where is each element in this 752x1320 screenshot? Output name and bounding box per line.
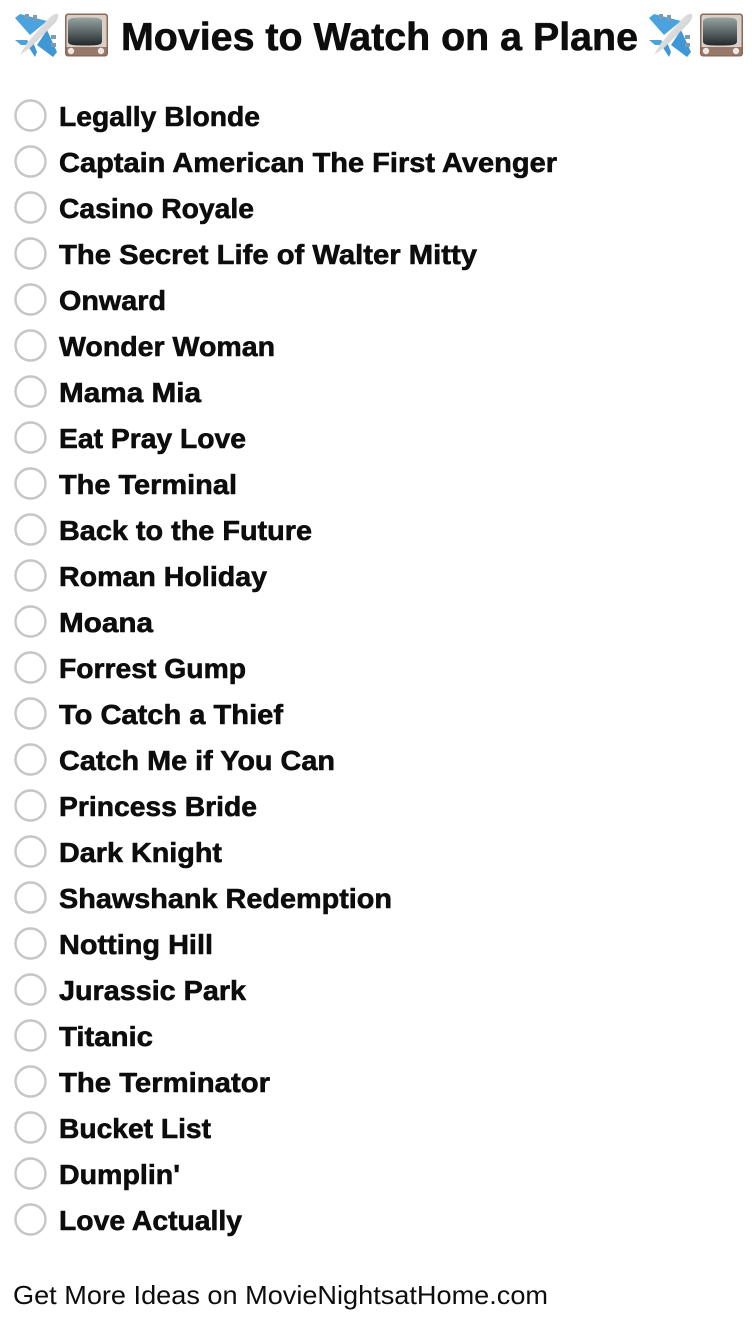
item: To Catch a Thief: To Catch a Thief xyxy=(59,699,284,730)
item: Onward xyxy=(16,284,166,316)
item: Dumplin': Dumplin' xyxy=(59,1159,180,1190)
item: Titanic: Titanic xyxy=(59,1021,153,1052)
checklist xyxy=(16,100,557,1236)
item: Princess Bride: Princess Bride xyxy=(59,791,257,822)
item: Moana xyxy=(16,606,153,638)
item: Moana: Moana xyxy=(59,607,153,638)
item: Eat Pray Love: Eat Pray Love xyxy=(59,423,246,454)
item: Legally Blonde: Legally Blonde xyxy=(59,101,260,132)
item: The Secret Life of Walter Mitty: The Secret Life of Walter Mitty xyxy=(59,239,477,270)
item: Casino Royale: Casino Royale xyxy=(59,193,254,224)
item: Forrest Gump: Forrest Gump xyxy=(59,653,246,684)
item: Dark Knight: Dark Knight xyxy=(59,837,222,868)
item: Back to the Future: Back to the Future xyxy=(59,515,312,546)
item: Notting Hill: Notting Hill xyxy=(59,929,213,960)
item: The Terminator: The Terminator xyxy=(59,1067,270,1098)
item: Titanic xyxy=(16,1020,153,1052)
item: Catch Me if You Can: Catch Me if You Can xyxy=(59,745,335,776)
item: Mama Mia: Mama Mia xyxy=(59,377,201,408)
icon: airplane right xyxy=(649,14,692,57)
item: Shawshank Redemption: Shawshank Redemption xyxy=(59,883,392,914)
item: Jurassic Park: Jurassic Park xyxy=(59,975,246,1006)
item: Onward: Onward xyxy=(59,285,166,316)
icon: television right xyxy=(700,14,743,56)
title: Movies to Watch on a Plane xyxy=(121,16,638,59)
icon: airplane left xyxy=(15,14,58,57)
footer text: Get More Ideas on MovieNightsatHome.com xyxy=(13,1280,548,1310)
item: Bucket List: Bucket List xyxy=(59,1113,211,1144)
item: Love Actually: Love Actually xyxy=(59,1205,242,1236)
item: Captain American The First Avenger: Captain American The First Avenger xyxy=(59,147,557,178)
item: Wonder Woman: Wonder Woman xyxy=(59,331,275,362)
item: Roman Holiday: Roman Holiday xyxy=(59,561,267,592)
icon: television left xyxy=(65,14,108,56)
item: The Terminal: The Terminal xyxy=(59,469,237,500)
